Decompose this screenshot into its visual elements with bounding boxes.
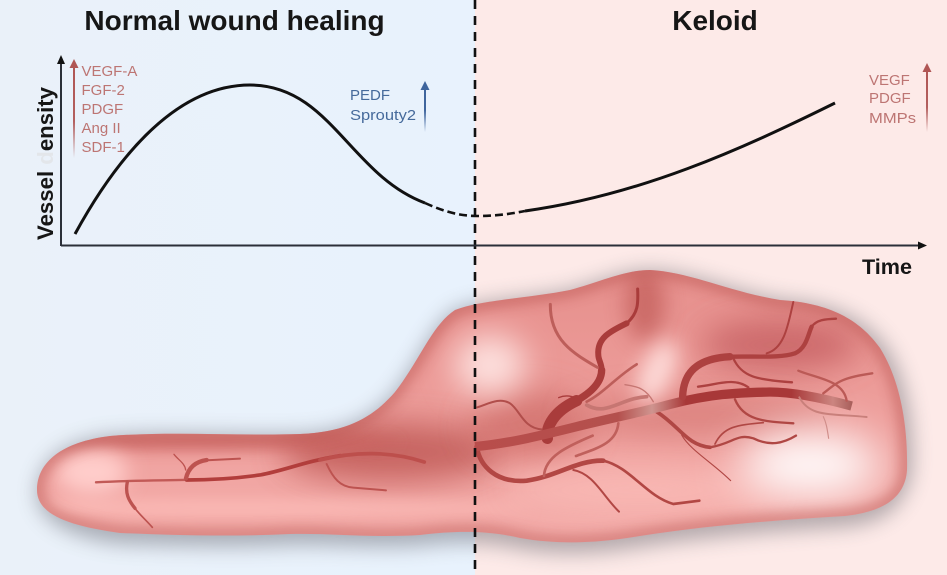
dashed divider bbox=[474, 0, 476, 575]
arrow: anti-angiogenic factors up bbox=[420, 81, 430, 132]
blood vessels: normal wound bbox=[96, 454, 424, 527]
panel background: normal wound healing bbox=[0, 0, 475, 575]
y axis label: Vessel density bbox=[33, 86, 58, 240]
factor list: keloid: VEGF bbox=[869, 72, 910, 89]
factor list: normal wound pro-angiogenic: VEGF-A bbox=[82, 63, 137, 80]
factor list: normal wound pro-angiogenic: FGF-2 bbox=[82, 82, 125, 99]
factor list: anti-angiogenic: Sprouty2 bbox=[350, 107, 416, 124]
body drop shadow bbox=[37, 270, 912, 553]
curve: dashed transition bbox=[425, 203, 525, 216]
factor list: normal wound pro-angiogenic bbox=[82, 63, 137, 156]
upper branching vessel bbox=[477, 289, 638, 438]
factor list: keloid: PDGF bbox=[869, 90, 911, 107]
factor list: normal wound pro-angiogenic: SDF-1 bbox=[82, 139, 125, 156]
factor list: anti-angiogenic bbox=[350, 87, 416, 124]
central descending branches bbox=[587, 385, 796, 481]
arrow: keloid factors up bbox=[922, 63, 932, 132]
factor list: anti-angiogenic: PEDF bbox=[350, 87, 390, 104]
factor list: keloid: MMPs bbox=[869, 110, 916, 127]
factor list: keloid bbox=[869, 72, 916, 127]
upper right vessel network bbox=[683, 302, 872, 438]
factor list: normal wound pro-angiogenic: PDGF bbox=[82, 101, 123, 118]
y axis bbox=[57, 55, 65, 246]
vessel branches bbox=[127, 454, 386, 527]
chart: vessel density over time bbox=[33, 55, 927, 279]
blood vessels: keloid bbox=[475, 289, 872, 512]
x axis bbox=[61, 242, 927, 250]
panel background: keloid bbox=[475, 0, 947, 575]
main vessel bbox=[96, 454, 424, 482]
factor list: normal wound pro-angiogenic: Ang II bbox=[82, 120, 121, 137]
main trunk vessel bbox=[475, 392, 852, 447]
title: keloid: Keloid bbox=[672, 5, 758, 36]
lower left vessel network bbox=[477, 423, 699, 512]
title: normal wound healing: Normal wound healing bbox=[84, 5, 385, 36]
arrow: pro-angiogenic factors up bbox=[70, 59, 78, 158]
skin tissue: wound scar and raised keloid bbox=[0, 269, 907, 542]
curve: keloid sustained rise bbox=[525, 103, 835, 211]
x axis label: Time bbox=[862, 256, 912, 279]
curve: solid rise and fall bbox=[75, 85, 425, 234]
